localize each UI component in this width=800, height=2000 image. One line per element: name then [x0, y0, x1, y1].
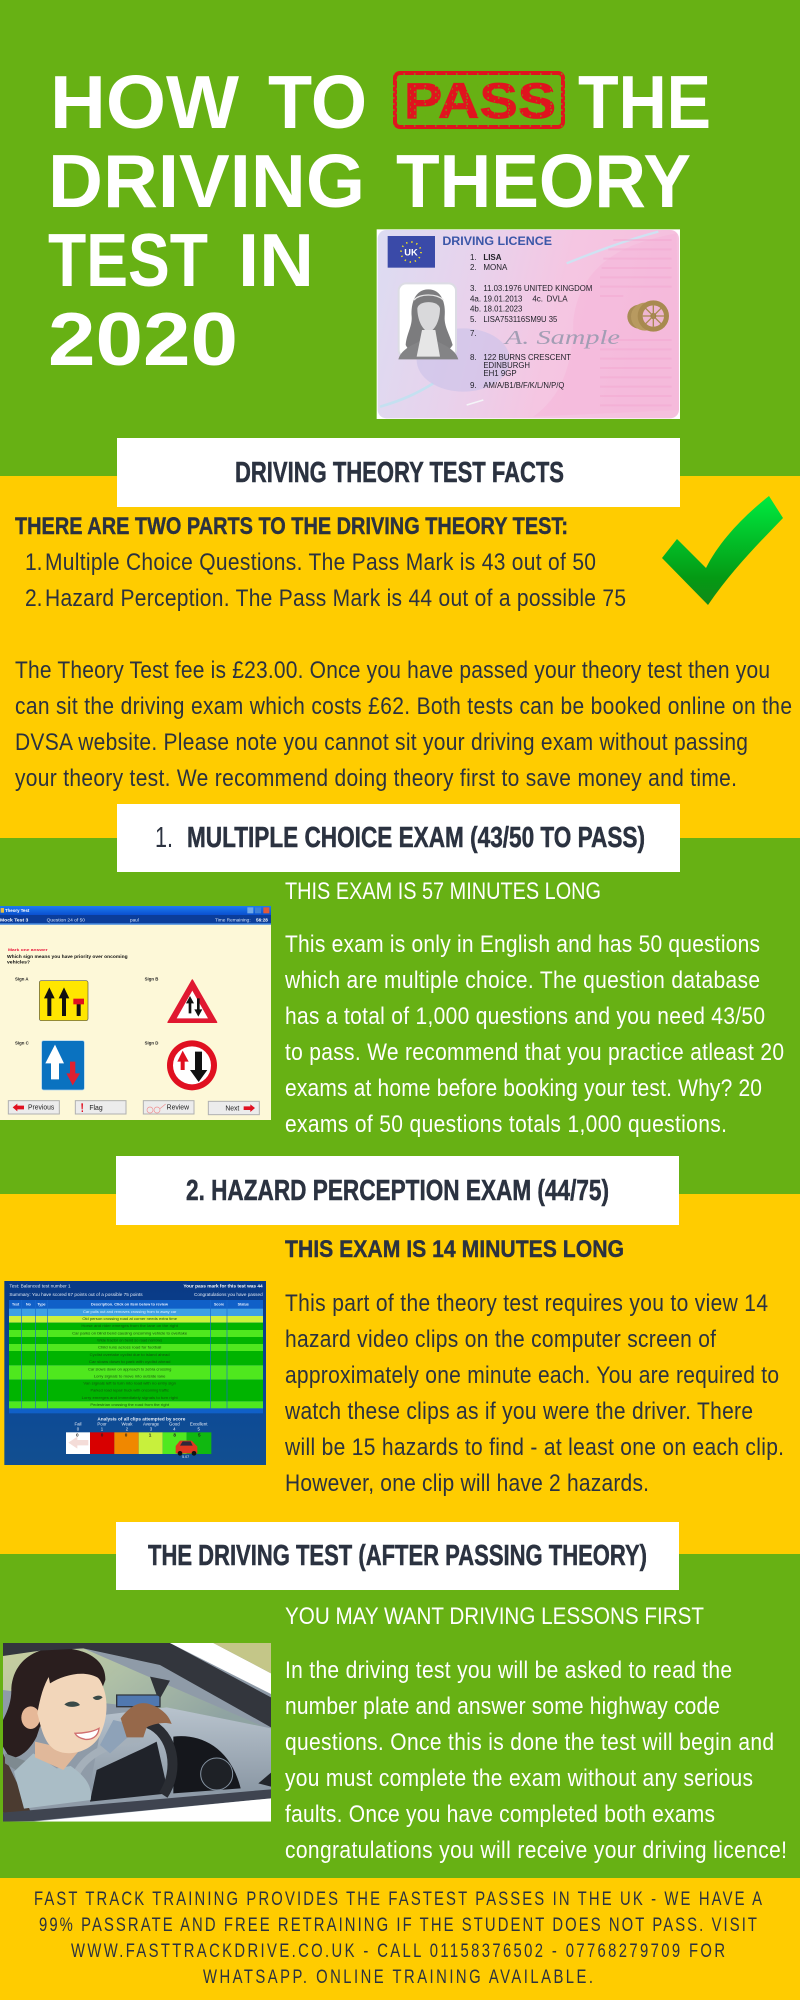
licence fields: AM/A/B1/B/F/K/L/N/P/Q: [483, 381, 564, 390]
results table: Car parks on blind bend causing oncoming vehicle to overtake: [72, 1331, 187, 1335]
text: hazard perception details: [284, 1236, 784, 1496]
results table: Horse and rider emerges from the lane on the right: [81, 1324, 178, 1328]
text: hazard perception details: will be 15 hazards to find - at least one on each clip.: [284, 1434, 784, 1460]
score analysis bar: 1: [149, 1433, 152, 1438]
sign A: Sign A: [15, 977, 29, 982]
sign C: Sign C: [15, 1041, 29, 1046]
licence fields: LISA: [483, 253, 502, 262]
text: two parts heading and list: THERE ARE TWO PARTS TO THE DRIVING THEORY TEST:: [15, 513, 568, 540]
score analysis bar: [66, 1416, 211, 1459]
score analysis bar: 4: [173, 1426, 176, 1431]
licence heading: DRIVING LICENCE: [442, 235, 552, 248]
score analysis bar: Poor: [97, 1422, 107, 1427]
title: DRIVING: [48, 139, 365, 223]
title: TO: [268, 60, 367, 144]
licence fields: LISA753116SM9U 35: [483, 315, 558, 324]
screenshot question: Mark one answer: [8, 947, 48, 952]
text: driving test details: number plate and answer some highway code: [285, 1693, 720, 1719]
screenshot title bars: Mock Test 3: [0, 918, 29, 923]
text: multiple choice exam details: THIS EXAM IS 57 MINUTES LONG: [285, 878, 601, 905]
panel header: multiple choice exam: [117, 804, 680, 872]
licence hologram wheel: [627, 300, 669, 332]
results summary text: Test: Balanced test number 1: [9, 1283, 71, 1288]
panel header: multiple choice exam: MULTIPLE CHOICE EXAM (43/50 TO PASS): [187, 822, 645, 854]
licence fields: 3.: [470, 284, 477, 293]
screenshot question: vehicles?: [7, 959, 30, 964]
title: [48, 60, 711, 381]
image: sample driving licence: [377, 229, 680, 419]
results table: Cyclist overtake cyclist due to island ahead: [90, 1353, 170, 1357]
panel header: hazard perception exam: [116, 1156, 679, 1225]
text: fee paragraph: DVSA website. Please note you cannot sit your driving exam without passing: [15, 729, 748, 755]
text: driving test details: you must complete the exam without any serious: [285, 1765, 753, 1791]
results table: [9, 1300, 263, 1413]
score analysis bar: Weak: [121, 1422, 133, 1427]
footer: contact call to action: [34, 1888, 763, 1987]
results table: Old person crossing road at corner needs extra time: [82, 1317, 177, 1321]
text: driving test details: questions. Once this is done the test will begin and: [285, 1729, 774, 1755]
licence fields: 11.03.1976 UNITED KINGDOM: [483, 284, 592, 293]
results table: Van signals left to turn into road with no entry sign: [83, 1381, 176, 1385]
licence fields: EDINBURGH: [483, 361, 530, 370]
licence fields: 122 BURNS CRESCENT: [483, 353, 571, 362]
licence fields: 4c.: [532, 295, 543, 304]
text: fee paragraph: your theory test. We recommend doing theory first to save money and time.: [15, 765, 737, 791]
footer: contact call to action: WWW.FASTTRACKDRIVE.CO.UK - CALL 01158376502 - 07768279709 FOR: [71, 1940, 725, 1961]
icon: green check mark: [662, 496, 783, 605]
licence signature: A. Sample: [502, 327, 620, 349]
results table: Lorry emerges and immediately signals to turn right: [82, 1396, 178, 1400]
licence fields: DVLA: [547, 295, 568, 304]
title: 2020: [48, 297, 238, 381]
text: driving test details: faults. Once you have completed both exams: [285, 1801, 715, 1827]
panel header: driving theory test facts: DRIVING THEORY TEST FACTS: [235, 457, 564, 489]
licence fields: 8.: [470, 353, 477, 362]
licence fields: 19.01.2013: [483, 295, 523, 304]
stamp: PASS: PASS: [404, 73, 556, 129]
results summary text: [9, 1283, 263, 1297]
text: driving test details: [285, 1603, 787, 1863]
title: HOW: [50, 60, 240, 144]
score analysis bar: Good: [169, 1422, 180, 1427]
text: hazard perception details: THIS EXAM IS 14 MINUTES LONG: [285, 1236, 624, 1263]
licence fields: MONA: [483, 263, 508, 272]
screenshot navigation buttons: Next: [225, 1103, 239, 1112]
results table: Test: [12, 1303, 20, 1307]
results table: Car slows down on approach to zebra crossing: [88, 1367, 171, 1371]
text: two parts heading and list: Multiple Choice Questions. The Pass Mark is 43 out of 50: [45, 549, 596, 575]
sign C: [15, 1041, 84, 1090]
screenshot question: Which sign means you have priority over oncoming: [7, 954, 128, 959]
sign B: Sign B: [145, 977, 158, 982]
screenshot title bars: Theory Test: [5, 908, 30, 913]
text: multiple choice exam details: This exam is only in English and has 50 questions: [285, 931, 760, 957]
footer: contact call to action: 99% PASSRATE AND FREE RETRAINING IF THE STUDENT DOES NOT PASS. VISIT: [39, 1914, 757, 1935]
text: driving test details: In the driving test you will be asked to read the: [285, 1657, 732, 1683]
results table: Child runs across road for football: [98, 1346, 162, 1350]
sign D: Sign D: [145, 1041, 158, 1046]
results table: Pedestrian crossing the road from the right: [90, 1403, 169, 1407]
title: THEORY: [396, 139, 691, 223]
panel header: multiple choice exam: 1.: [155, 822, 173, 854]
footer: contact call to action: FAST TRACK TRAINING PROVIDES THE FASTEST PASSES IN THE UK - WE HAVE A: [34, 1888, 763, 1909]
results summary text: Summary: You have scored 67 points out of a possible 75 points: [9, 1292, 143, 1297]
score analysis bar: Excellent: [190, 1422, 208, 1427]
text: multiple choice exam details: [284, 878, 784, 1137]
score analysis bar: 5: [197, 1426, 200, 1431]
text: multiple choice exam details: to pass. We recommend that you practice atleast 20: [285, 1039, 784, 1065]
car marker: 5.07: [182, 1455, 189, 1459]
screenshot title bars: Time Remaining:: [215, 918, 251, 923]
licence fields: 18.01.2023: [483, 305, 523, 314]
licence fields: 9.: [470, 381, 477, 390]
text: hazard perception details: However, one clip will have 2 hazards.: [285, 1470, 649, 1496]
text: multiple choice exam details: has a total of 1,000 questions and you need 43/50: [285, 1003, 765, 1029]
text: fee paragraph: The Theory Test fee is £23.00. Once you have passed your theory test then you: [15, 657, 770, 683]
score analysis bar: Fail: [75, 1422, 82, 1427]
title: IN: [238, 218, 314, 302]
results table: Car slows down to park with cyclist ahead: [89, 1360, 170, 1364]
score analysis bar: Analysis of all clips attempted by score: [97, 1416, 186, 1421]
screenshot question: [7, 947, 128, 964]
screenshot navigation buttons: [8, 1101, 259, 1115]
text: fee paragraph: can sit the driving exam which costs £62. Both tests can be booked online on the: [15, 693, 792, 719]
screenshot title bars: 56:28: [256, 918, 268, 923]
score analysis bar: 0: [101, 1433, 104, 1438]
panel header: hazard perception exam: 2. HAZARD PERCEPTION EXAM (44/75): [186, 1175, 609, 1207]
sign D: [145, 1040, 217, 1090]
image: smiling woman at the wheel: [3, 1643, 271, 1822]
results table: No: [26, 1303, 32, 1307]
text: two parts heading and list: [15, 513, 626, 611]
panel header: the driving test: THE DRIVING TEST (AFTER PASSING THEORY): [148, 1540, 647, 1572]
score analysis bar: 2: [126, 1426, 129, 1431]
screenshot navigation buttons: Review: [167, 1103, 190, 1112]
licence EU flag: [388, 236, 435, 268]
results table: Car pulls out and removes crossing from to away car: [83, 1310, 177, 1314]
score analysis bar: 8: [173, 1433, 176, 1438]
text: hazard perception details: approximately one minute each. You are required to: [285, 1362, 779, 1388]
text: hazard perception details: This part of the theory test requires you to view 14: [285, 1290, 768, 1316]
licence fields: [470, 253, 592, 390]
text: hazard perception details: watch these clips as if you were the driver. There: [284, 1398, 753, 1424]
image: hazard perception results screenshot: [4, 1281, 266, 1465]
text: hazard perception details: hazard video clips on the computer screen of: [285, 1326, 717, 1352]
results table: Wide tractor on bend so road narrows: [97, 1339, 162, 1343]
licence fields: 2.: [470, 263, 477, 272]
sign A: [15, 977, 88, 1021]
results summary text: Congratulations you have passed: [194, 1292, 263, 1297]
licence fields: 1.: [470, 253, 477, 262]
score analysis bar: 5: [198, 1433, 201, 1438]
title: THE: [578, 60, 711, 144]
screenshot title bars: paul: [130, 918, 139, 923]
sign B: [145, 977, 217, 1022]
licence portrait: [398, 283, 458, 359]
score analysis bar: 3: [150, 1426, 153, 1431]
licence fields: 5.: [470, 315, 477, 324]
licence fields: 7.: [470, 329, 477, 338]
text: fee paragraph: [15, 657, 792, 791]
results summary text: Your pass mark for this test was 44: [183, 1283, 263, 1288]
results table: Lorry signals to move into outside lane: [94, 1374, 165, 1378]
licence fields: 4b.: [470, 305, 481, 314]
score analysis bar: 0: [77, 1426, 80, 1431]
text: multiple choice exam details: exams of 50 questions totals 1,000 questions.: [285, 1111, 727, 1137]
text: driving test details: YOU MAY WANT DRIVING LESSONS FIRST: [285, 1603, 704, 1630]
title: TEST: [48, 218, 208, 302]
text: multiple choice exam details: which are multiple choice. The question database: [284, 967, 760, 993]
screenshot title bars: [0, 906, 271, 925]
image: multiple choice test screenshot: [0, 906, 271, 1120]
text: two parts heading and list: 2.: [25, 585, 43, 611]
panel header: driving theory test facts: [117, 438, 680, 507]
screenshot navigation buttons: Previous: [28, 1103, 55, 1112]
score analysis bar: 1: [101, 1426, 104, 1431]
car marker: [176, 1441, 197, 1459]
screenshot title bars: Question 24 of 50: [47, 918, 85, 923]
text: two parts heading and list: 1.: [25, 549, 43, 575]
panel header: the driving test: [116, 1522, 679, 1590]
results table: Status: [238, 1303, 249, 1307]
results table: Score: [214, 1303, 224, 1307]
score analysis bar: 0: [125, 1433, 128, 1438]
screenshot navigation buttons: Flag: [89, 1103, 103, 1112]
results table: Type: [37, 1303, 46, 1307]
results table: Description. Click on item below to review: [91, 1303, 168, 1307]
licence EU flag: UK: [404, 247, 418, 257]
licence fields: EH1 9GP: [483, 369, 517, 378]
score analysis bar: 0: [76, 1433, 79, 1438]
licence fields: 4a.: [470, 295, 481, 304]
footer: contact call to action: WHATSAPP. ONLINE TRAINING AVAILABLE.: [203, 1966, 593, 1987]
results table: Parked road repair truck with oncoming traffic: [90, 1389, 169, 1393]
text: driving test details: congratulations you will receive your driving licence!: [285, 1837, 787, 1863]
text: multiple choice exam details: exams at home before booking your test. Why? 20: [285, 1075, 762, 1101]
score analysis bar: Average: [143, 1422, 160, 1427]
text: two parts heading and list: Hazard Perception. The Pass Mark is 44 out of a possible 75: [45, 585, 626, 611]
